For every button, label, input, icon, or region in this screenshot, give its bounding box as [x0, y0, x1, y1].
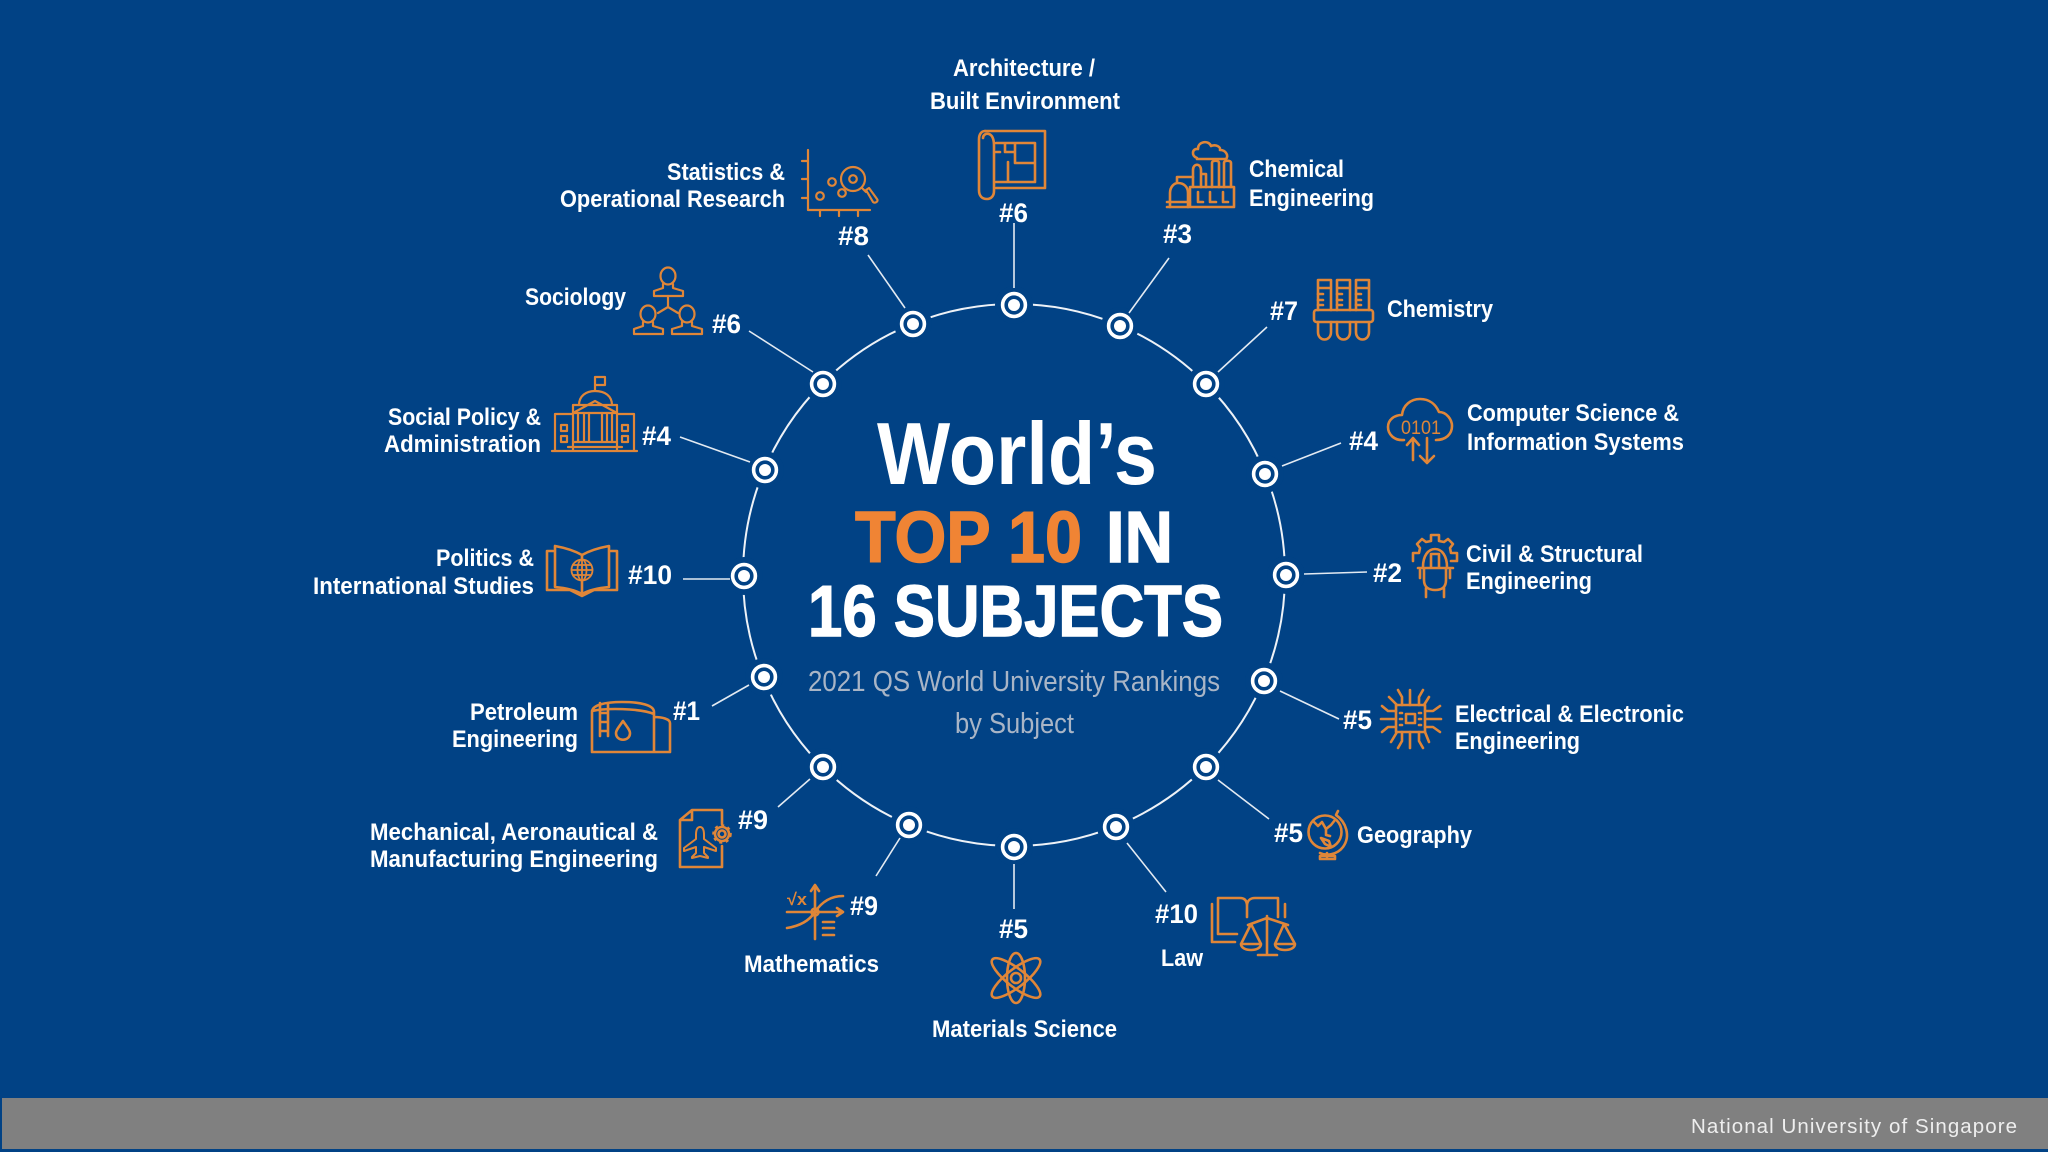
- subject: Social Policy & Administration: Administration: [384, 431, 541, 458]
- subject: Law: [1155, 898, 1295, 972]
- subject: Civil & Structural Engineering: #2: [1373, 558, 1402, 588]
- footer bar: National University of Singapore: [1691, 1115, 2017, 1138]
- subject: Computer Science & Information Systems: [1349, 399, 1684, 463]
- subject: Politics & International Studies: International Studies: [313, 573, 534, 600]
- subject: Statistics & Operational Research: Operational Research: [560, 186, 785, 213]
- subject: Sociology: #6: [712, 309, 741, 339]
- title: TOP 10: [855, 498, 1082, 578]
- subject: Petroleum Engineering: Petroleum: [470, 699, 578, 726]
- title: World’s: [877, 404, 1157, 503]
- icon: atom: [987, 952, 1045, 1004]
- subject: Social Policy & Administration: Social Policy &: [388, 404, 541, 431]
- subtitle: by Subject: [955, 708, 1074, 740]
- subject: Social Policy & Administration: #4: [642, 421, 671, 451]
- subject: Materials Science: [932, 914, 1117, 1043]
- subject: Mechanical, Aeronautical & Manufacturing Engineering: Mechanical, Aeronautical &: [370, 819, 658, 846]
- icon: scatter plot with magnifier: [802, 150, 878, 216]
- subject: Chemical Engineering: [1163, 142, 1374, 249]
- icon: gear and helmet: [1413, 535, 1457, 597]
- subject: Law: Law: [1161, 945, 1203, 972]
- subtitle: 2021 QS World University Rankings: [808, 666, 1220, 698]
- icon: three people network: [634, 268, 702, 334]
- subject: Civil & Structural Engineering: [1373, 535, 1643, 597]
- icon: microchip: [1381, 690, 1441, 748]
- subject: Petroleum Engineering: [452, 696, 700, 753]
- subject: Architecture / Built Environment: Built Environment: [930, 88, 1120, 115]
- subject: Computer Science & Information Systems: #4: [1349, 426, 1378, 456]
- subject: Electrical & Electronic Engineering: Engineering: [1455, 728, 1580, 755]
- icon: blueprint: [979, 131, 1045, 199]
- subject: Mathematics: [744, 885, 879, 978]
- subject: Chemical Engineering: Chemical: [1249, 156, 1344, 183]
- icon: test tubes: [1314, 280, 1373, 340]
- title: [808, 404, 1223, 652]
- subject: Sociology: Sociology: [525, 284, 627, 311]
- subject: Politics & International Studies: #10: [628, 560, 672, 590]
- subject: Politics & International Studies: [313, 545, 672, 600]
- subject: Materials Science: #5: [999, 914, 1028, 944]
- icon: plane document with gear: [680, 810, 730, 867]
- subject: Petroleum Engineering: Engineering: [452, 726, 578, 753]
- subject: Electrical & Electronic Engineering: #5: [1343, 705, 1372, 735]
- subject: Electrical & Electronic Engineering: [1343, 690, 1684, 755]
- icon: cloud data: 0101: [1401, 418, 1441, 439]
- subject: Mechanical, Aeronautical & Manufacturing Engineering: [370, 805, 768, 873]
- subject: Mathematics: Mathematics: [744, 951, 879, 978]
- subject: Architecture / Built Environment: Architecture /: [953, 55, 1095, 82]
- subject: Computer Science & Information Systems: Computer Science &: [1467, 400, 1679, 427]
- subject: Statistics & Operational Research: Statistics &: [667, 159, 785, 186]
- subject: Mechanical, Aeronautical & Manufacturing Engineering: Manufacturing Engineering: [370, 846, 658, 873]
- subject: Civil & Structural Engineering: Civil & Structural: [1466, 541, 1643, 568]
- subject: Petroleum Engineering: #1: [673, 696, 700, 726]
- subject: Chemistry: Chemistry: [1387, 296, 1494, 323]
- subject: Materials Science: Materials Science: [932, 1016, 1117, 1043]
- subject: Mathematics: #9: [850, 891, 878, 921]
- subject: Mechanical, Aeronautical & Manufacturing Engineering: #9: [738, 805, 768, 835]
- subject: Chemical Engineering: #3: [1163, 219, 1192, 249]
- subject: Sociology: [525, 268, 741, 339]
- icon: government building: [552, 377, 637, 451]
- icon: book and scales: [1212, 898, 1295, 955]
- subject: Architecture / Built Environment: [930, 55, 1120, 228]
- subject: Statistics & Operational Research: [560, 150, 878, 251]
- icon: cloud data: [1388, 399, 1452, 463]
- subject: Law: #10: [1155, 899, 1198, 929]
- icon: function graph: √x: [787, 890, 808, 909]
- icon: book with globe: [547, 546, 617, 596]
- subtitle: [808, 666, 1220, 740]
- footer bar: [2, 1098, 2048, 1149]
- subject: Geography: Geography: [1357, 822, 1473, 849]
- title: 16 SUBJECTS: [808, 572, 1223, 652]
- subject: Electrical & Electronic Engineering: Electrical & Electronic: [1455, 701, 1684, 728]
- subject: Politics & International Studies: Politics &: [436, 545, 534, 572]
- subject: Geography: [1274, 811, 1473, 859]
- title: IN: [1106, 498, 1173, 578]
- subject: Civil & Structural Engineering: Engineering: [1466, 568, 1592, 595]
- subject: Chemical Engineering: Engineering: [1249, 185, 1374, 212]
- subject: Chemistry: #7: [1270, 296, 1298, 326]
- subject: Architecture / Built Environment: #6: [999, 198, 1028, 228]
- ring with nodes and spokes: [680, 223, 1367, 909]
- icon: globe: [1308, 811, 1347, 859]
- icon: factory: [1167, 142, 1234, 207]
- subject: Computer Science & Information Systems: Information Systems: [1467, 429, 1684, 456]
- subject: Geography: #5: [1274, 818, 1303, 848]
- icon: oil tank: [592, 702, 670, 752]
- subject: Statistics & Operational Research: #8: [838, 221, 869, 251]
- subject: Social Policy & Administration: [384, 377, 671, 458]
- subject: Chemistry: [1270, 280, 1494, 340]
